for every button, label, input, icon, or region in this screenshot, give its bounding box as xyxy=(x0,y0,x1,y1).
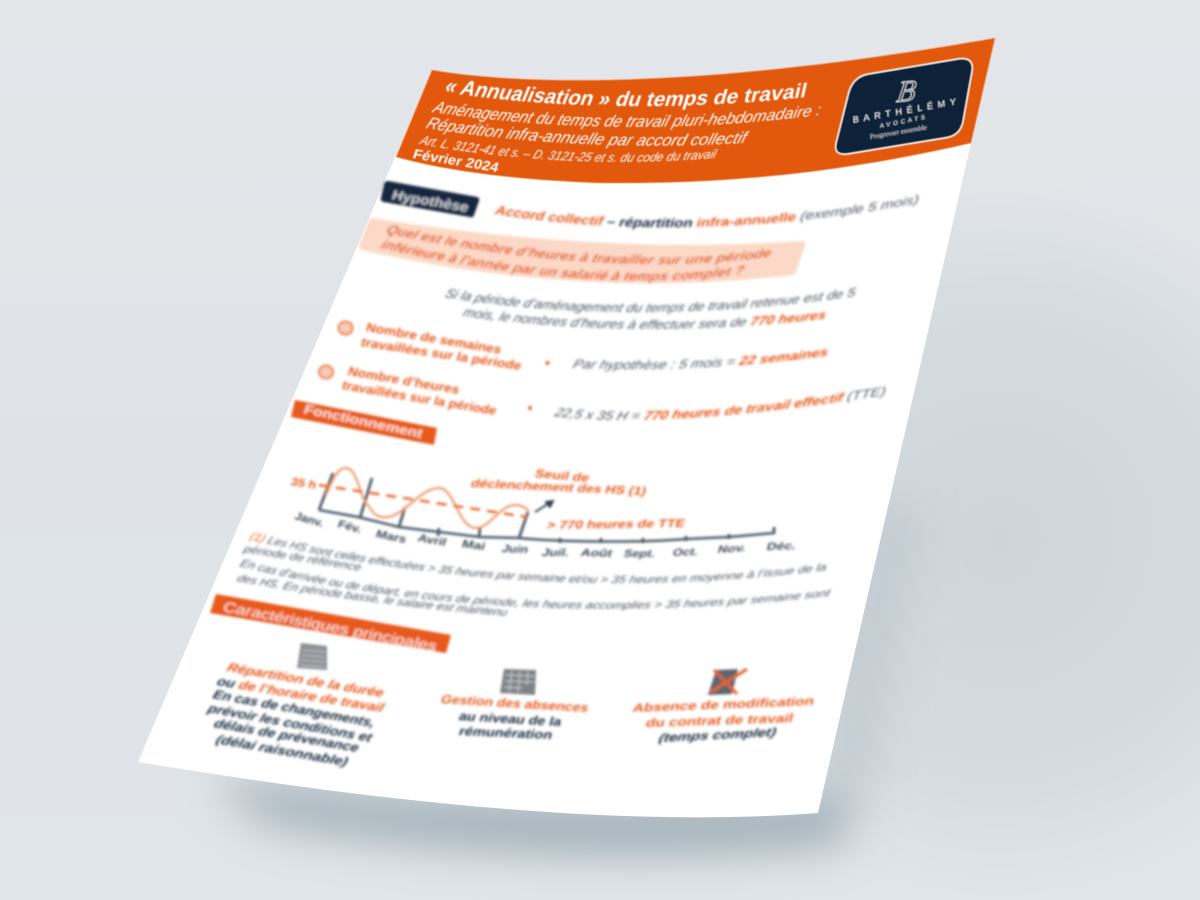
month ticks xyxy=(319,473,774,543)
month labels: Déc. xyxy=(765,540,797,553)
logo xyxy=(836,59,972,154)
logo monogram: B xyxy=(895,73,918,109)
column 1 text: ou de l’horaire de travail xyxy=(215,674,387,715)
threshold label: Seuil de xyxy=(533,466,592,485)
column 1 text: En cas de changements, xyxy=(211,687,377,730)
body content xyxy=(204,179,920,770)
month labels: Nov. xyxy=(716,542,747,556)
badge: caracteristiques xyxy=(210,594,451,654)
item 1 label: Nombre de semaines xyxy=(364,320,504,357)
770 hours label: > 770 heures de TTE xyxy=(545,517,687,532)
arrow to threshold xyxy=(535,501,553,512)
item 2: hours xyxy=(316,362,887,422)
subtitle line 2: Répartition infra-annuelle par accord collectif xyxy=(425,116,750,149)
item 1 value: Par hypothèse : 5 mois = 22 semaines xyxy=(571,348,830,374)
column 2 text: Gestion des absences xyxy=(439,692,591,715)
icon: crossed contract xyxy=(708,669,747,695)
month labels: Avril xyxy=(416,532,448,549)
date: Février 2024 xyxy=(411,146,501,175)
column 3 xyxy=(631,669,816,745)
footnote xyxy=(236,531,832,618)
question callout xyxy=(358,217,806,285)
footnote: (1) Les HS sont celles effectuées > 35 heures par semaine et/ou > 35 heures en moyenne à l’issue de la xyxy=(248,531,828,585)
icon: absence calendar xyxy=(500,669,536,695)
timeline chart xyxy=(289,466,797,560)
footnote: En cas d’arrivée ou de départ, en cours de période, les heures accomplies > 35 heures par semaine sont xyxy=(238,558,832,612)
question callout: Quel est le nombre d’heures à travailler sur une période xyxy=(386,224,772,266)
legal references: Art. L. 3121-41 et s. – D. 3121-25 et s. du code du travail xyxy=(418,136,718,163)
item 2 bullet xyxy=(528,406,532,410)
badge: fonctionnement: Fonctionnement xyxy=(302,401,426,441)
column 1 text: Répartition de la durée xyxy=(225,660,386,700)
title: « Annualisation » du temps de travail xyxy=(446,80,808,111)
month labels: Fév. xyxy=(336,518,363,536)
column 3 text: Absence de modification xyxy=(631,694,816,715)
item 2 value: 22,5 x 35 H = 770 heures de travail effectif (TTE) xyxy=(552,385,887,422)
column 2 text xyxy=(439,692,591,742)
hypothesis line: Accord collectif – répartition infra-annuelle (exemple 5 mois) xyxy=(493,193,920,231)
item 1 label xyxy=(359,320,524,373)
paper shadow xyxy=(210,500,915,851)
item 1 label: travaillées sur la période xyxy=(359,335,524,373)
month labels: Janv. xyxy=(293,510,325,530)
item 2 label xyxy=(340,364,499,418)
item 2 label: travaillées sur la période xyxy=(340,378,499,418)
column 1 text: (délai raisonnable) xyxy=(214,732,350,769)
column 1 text xyxy=(205,660,387,769)
column 3 text: (temps complet) xyxy=(657,725,778,745)
month labels: Sept. xyxy=(622,548,657,560)
intro paragraph: Si la période d’aménagement du temps de travail retenue est de 5 xyxy=(444,286,858,316)
month labels: Mars xyxy=(374,528,408,546)
question callout: inférieure à l’année par un salarié à temps complet ? xyxy=(380,238,746,284)
background soft shade xyxy=(640,180,1200,900)
threshold label xyxy=(469,466,649,498)
icon: number 2 xyxy=(319,366,333,378)
month labels: Juil. xyxy=(540,547,571,559)
month labels: Oct. xyxy=(671,546,699,559)
intro paragraph xyxy=(444,286,858,330)
35 h label: 35 h xyxy=(289,476,318,492)
paper sheet xyxy=(138,38,995,817)
column 1 xyxy=(205,643,387,769)
header band xyxy=(396,38,995,183)
column 3 text: du contrat de travail xyxy=(644,711,795,730)
column 2 xyxy=(439,669,591,742)
logo name: BARTHÉLÉMY xyxy=(853,97,956,125)
month labels: Août xyxy=(579,547,614,560)
badge: hypothese xyxy=(381,181,479,217)
item 2 label: Nombre d’heures xyxy=(346,364,462,397)
logo sub name: AVOCATS xyxy=(880,115,925,130)
threshold dashed line xyxy=(319,485,527,517)
icon: number 1 xyxy=(338,322,352,334)
badge: fonctionnement xyxy=(291,400,437,445)
column 2 text: rémunération xyxy=(457,724,555,742)
item 1 bullet xyxy=(546,361,550,365)
footnote: période de référence xyxy=(241,543,363,574)
column 3 text xyxy=(631,694,816,745)
subtitle line 1: Aménagement du temps de travail pluri-hebdomadaire : xyxy=(430,101,822,130)
month labels: Juin xyxy=(500,543,530,556)
column 1 text: délais de prévenance xyxy=(212,716,361,755)
month labels xyxy=(293,510,797,560)
footnote: des HS. En période basse, le salaire est maintenu xyxy=(236,573,510,618)
axis xyxy=(319,510,774,542)
month labels: Mai xyxy=(460,538,487,553)
working hours curve xyxy=(326,468,529,528)
column 1 text: prévoir les conditions et xyxy=(205,701,375,745)
icon: calendar document xyxy=(297,643,327,670)
badge: caracteristiques: Caractéristiques principales xyxy=(221,599,439,654)
badge: hypothese: Hypothèse xyxy=(390,187,471,215)
column 2 text: au niveau de la xyxy=(457,709,564,729)
logo tagline: Progresser ensemble xyxy=(870,123,927,141)
intro paragraph: mois, le nombres d’heures à effectuer sera de 770 heures xyxy=(461,308,828,330)
logo box xyxy=(836,59,972,154)
header text xyxy=(411,80,822,175)
item 1: weeks xyxy=(336,318,830,374)
threshold label: déclenchement des HS (1) xyxy=(469,476,649,498)
